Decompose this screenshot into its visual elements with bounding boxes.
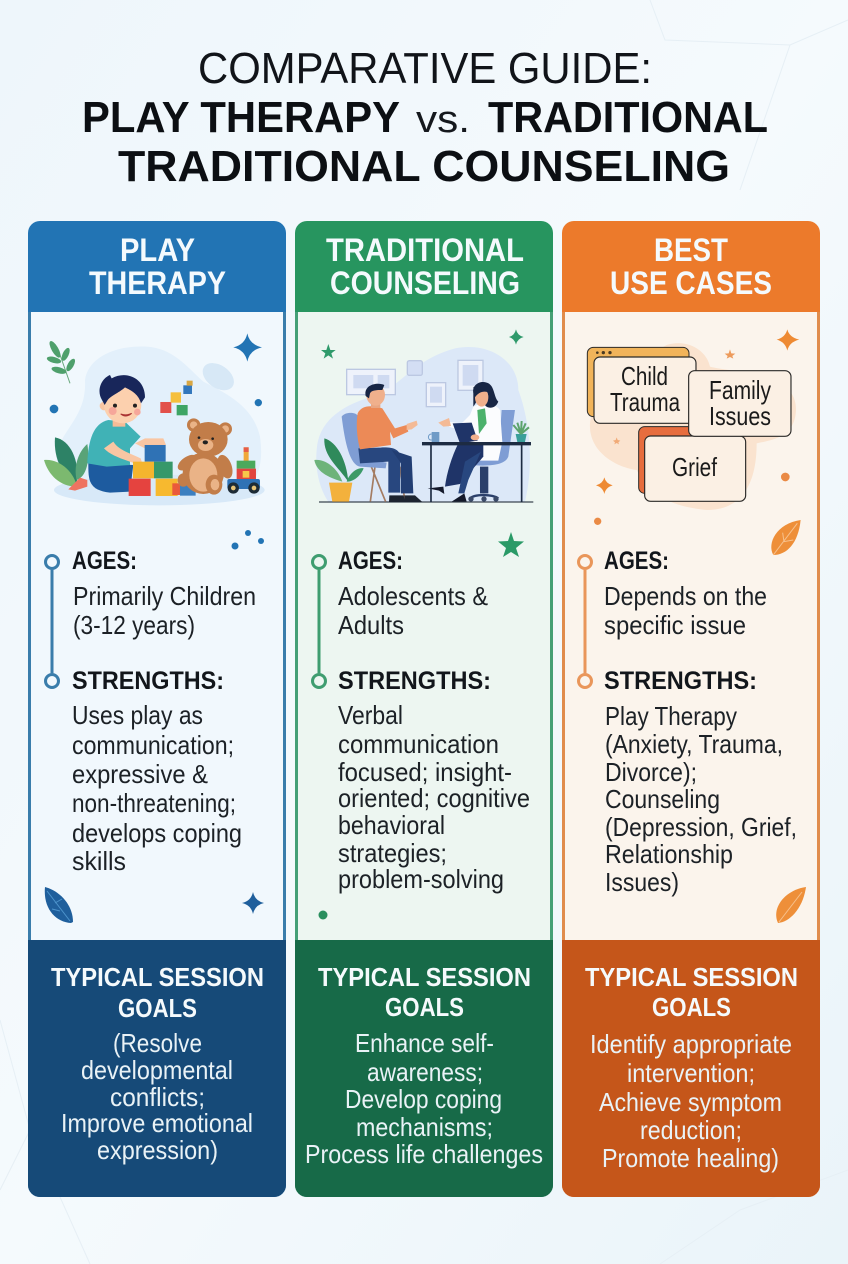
title: PLAY THERAPY: [82, 93, 400, 142]
title: vs.: [416, 99, 470, 141]
text: ages: AGES:: [338, 547, 403, 575]
text: session goals: TYPICAL SESSION: [318, 964, 531, 992]
text: session goals: (Resolve: [113, 1028, 202, 1058]
label: family issues: Issues: [709, 401, 771, 431]
text: session goals: GOALS: [385, 994, 464, 1022]
icon: blue leaf: [45, 887, 73, 923]
text: session goals: GOALS: [652, 994, 731, 1022]
text: session goals: Process life challenges: [305, 1139, 543, 1169]
text: ages: [604, 547, 767, 640]
text: session goals: conflicts;: [110, 1082, 205, 1112]
text: ages: specific issue: [604, 610, 746, 640]
text: strengths: non-threatening;: [72, 788, 236, 818]
text: session goals: GOALS: [118, 995, 197, 1023]
text: strengths: communication: [338, 729, 499, 759]
heading: best use cases: [610, 232, 772, 301]
text: session goals: developmental: [81, 1055, 233, 1085]
text: strengths: (Anxiety, Trauma,: [605, 729, 783, 759]
title: TRADITIONAL: [488, 93, 768, 142]
text: ages: Adolescents &: [338, 581, 488, 611]
icon: orange leaf small: [776, 887, 806, 923]
title: COMPARATIVE GUIDE:: [198, 44, 652, 93]
text: strengths: (Depression, Grief,: [605, 812, 797, 842]
text: strengths: Issues): [605, 867, 679, 897]
text: strengths: develops coping: [72, 818, 242, 848]
heading: traditional counseling: COUNSELING: [330, 265, 520, 301]
figure: desk: [422, 421, 531, 502]
label: child trauma: Trauma: [610, 387, 680, 417]
heading: traditional counseling: TRADITIONAL: [326, 232, 524, 268]
decorative dots: [232, 530, 264, 550]
timeline: [312, 556, 326, 688]
text: session goals: Develop coping: [345, 1084, 502, 1114]
text: session goals: awareness;: [367, 1057, 483, 1087]
text: ages: AGES:: [604, 547, 669, 575]
text: strengths: oriented; cognitive: [338, 783, 530, 813]
figure: plant: [314, 438, 364, 502]
icon: leaves: [44, 437, 88, 491]
text: session goals: [305, 964, 543, 1169]
card: family issues: [689, 371, 791, 436]
label: grief: Grief: [672, 452, 718, 482]
text: session goals: TYPICAL SESSION: [585, 964, 798, 992]
heading: traditional counseling: [326, 232, 524, 301]
heading: best use cases: USE CASES: [610, 265, 772, 301]
text: strengths: [72, 667, 242, 876]
text: session goals: [585, 964, 798, 1173]
icon: green star: [498, 532, 524, 557]
figure: boy: [87, 375, 166, 493]
text: session goals: Improve emotional: [61, 1108, 253, 1138]
text: session goals: expression): [97, 1135, 218, 1165]
text: session goals: Identify appropriate: [590, 1029, 792, 1059]
icon: sprig: [46, 340, 77, 383]
heading: play therapy: [89, 232, 226, 301]
blocks: [129, 381, 196, 496]
text: session goals: TYPICAL SESSION: [51, 964, 264, 992]
icon: stars: [321, 344, 336, 359]
text: ages: [72, 547, 256, 640]
label: family issues: Family: [709, 375, 771, 405]
illustration: child playing with blocks and teddy bear: [44, 333, 265, 505]
icon: sparkle: [233, 333, 262, 362]
panel: play therapy: [28, 221, 286, 1197]
text: session goals: Enhance self-: [355, 1028, 494, 1058]
title: TRADITIONAL COUNSELING: [118, 142, 730, 191]
figure: counselor: [428, 382, 515, 502]
label: child trauma: Child: [621, 361, 668, 391]
timeline: [46, 556, 58, 688]
icon: sparkles: [777, 329, 799, 351]
text: ages: Depends on the: [604, 581, 767, 611]
heading: play therapy: THERAPY: [89, 265, 226, 301]
figure: client on chair: [342, 384, 422, 502]
panel: best use cases: [562, 221, 820, 1197]
text: strengths: [604, 667, 797, 897]
text: strengths: STRENGTHS:: [604, 667, 757, 695]
text: strengths: STRENGTHS:: [338, 667, 491, 695]
text: strengths: Counseling: [605, 784, 720, 814]
text: strengths: [338, 667, 530, 894]
text: session goals: intervention;: [627, 1058, 755, 1088]
illustration: use case cards: [587, 329, 801, 555]
card: child trauma: [587, 347, 696, 423]
text: strengths: strategies;: [338, 838, 447, 868]
text: session goals: mechanisms;: [356, 1112, 493, 1142]
timeline: [578, 556, 592, 688]
text: ages: AGES:: [72, 547, 137, 575]
text: strengths: communication;: [72, 730, 234, 760]
text: session goals: Achieve symptom: [599, 1087, 782, 1117]
icon: small sparkle: [242, 892, 264, 914]
text: strengths: Uses play as: [72, 700, 203, 730]
label: family issues: [709, 375, 771, 431]
text: strengths: behavioral: [338, 810, 445, 840]
text: strengths: Play Therapy: [605, 701, 737, 731]
toy truck: [227, 447, 260, 494]
text: strengths: Verbal: [338, 700, 403, 730]
text: ages: Primarily Children: [73, 581, 256, 611]
text: strengths: skills: [72, 846, 126, 876]
text: strengths: focused; insight-: [338, 757, 512, 787]
text: strengths: expressive &: [72, 759, 208, 789]
text: session goals: reduction;: [640, 1115, 742, 1145]
illustration: counseling session: [314, 329, 533, 502]
heading: best use cases: BEST: [654, 232, 728, 268]
title: [82, 44, 768, 191]
wall pictures: [347, 360, 483, 407]
text: strengths: STRENGTHS:: [72, 667, 224, 695]
decorative dot: [318, 910, 328, 920]
text: strengths: Relationship: [605, 839, 733, 869]
panel: traditional counseling: [295, 221, 553, 1197]
label: child trauma: [610, 361, 680, 417]
text: strengths: Divorce);: [605, 757, 697, 787]
figure: teddy bear: [175, 418, 235, 495]
text: strengths: problem-solving: [338, 864, 504, 894]
icon: orange leaf: [771, 520, 801, 555]
card: grief: [639, 427, 746, 501]
floor: [319, 500, 533, 504]
heading: play therapy: PLAY: [120, 232, 195, 268]
text: ages: (3-12 years): [73, 610, 195, 640]
text: ages: Adults: [338, 610, 404, 640]
text: session goals: [51, 964, 264, 1165]
text: ages: [338, 547, 488, 640]
text: session goals: Promote healing): [602, 1143, 779, 1173]
